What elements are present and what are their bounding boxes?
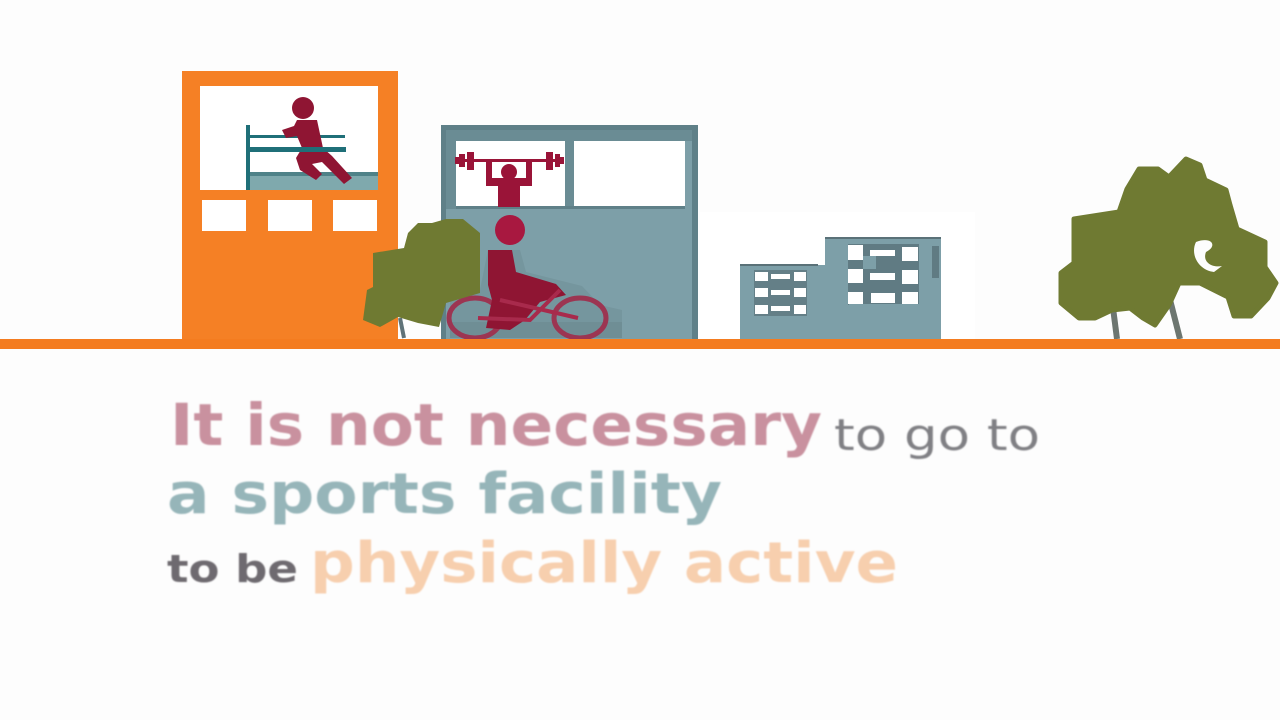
right windows [848, 244, 939, 307]
orange building with treadmill runner [182, 71, 398, 340]
treadmill front rail [250, 147, 346, 152]
small windows [202, 200, 377, 231]
ground line [0, 339, 1280, 349]
small tree [363, 219, 480, 338]
windows [456, 141, 685, 206]
grey building with weightlifter [441, 125, 698, 340]
line 3: to be [167, 547, 298, 591]
icon: treadmill [248, 125, 378, 190]
icon: cyclist [449, 215, 622, 338]
large window [200, 86, 378, 190]
line 1: It is not necessary [170, 391, 822, 459]
line 1: to go to [834, 410, 1040, 461]
line 3: physically active [310, 531, 898, 596]
large tree [1061, 159, 1276, 339]
line 2: a sports facility [167, 462, 722, 527]
line 1 [170, 391, 1040, 461]
left windows [754, 270, 807, 316]
icon: runner [282, 97, 352, 184]
message text [167, 391, 1040, 596]
apartment building [740, 238, 941, 340]
icon: weightlifter [455, 152, 564, 207]
